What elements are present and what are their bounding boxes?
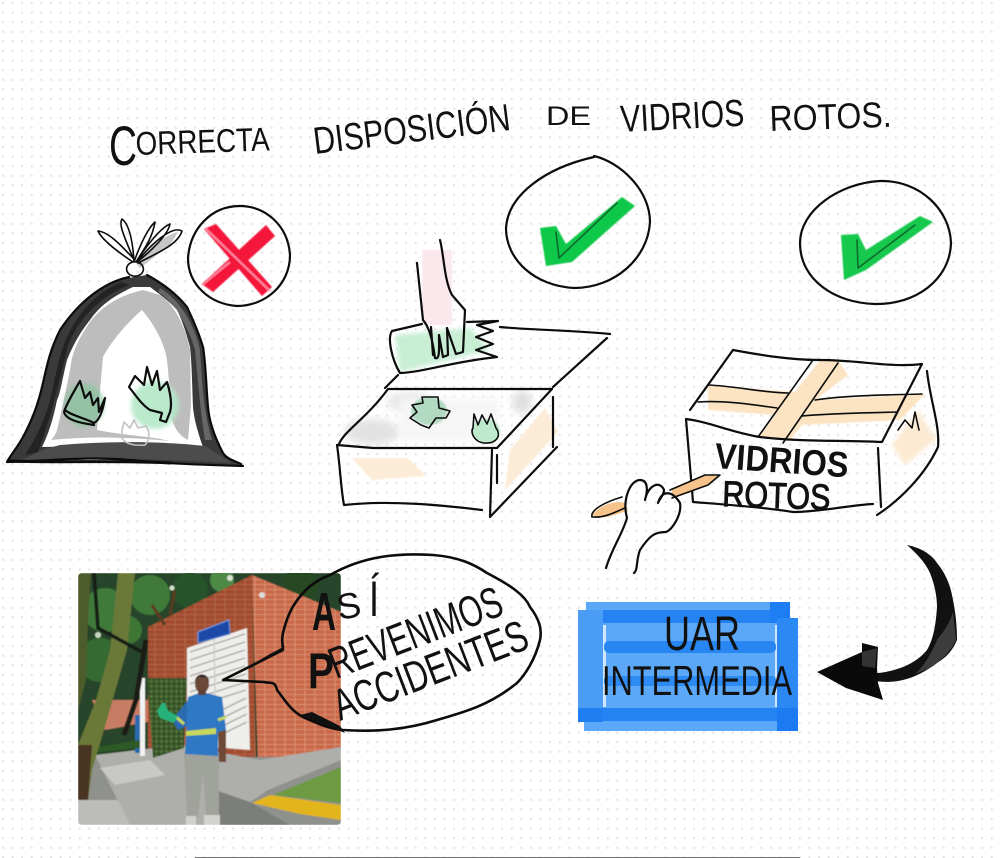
title: DISPOSICIÓN	[311, 96, 513, 163]
open box	[337, 327, 610, 517]
speech text: REVENIMOS	[322, 577, 509, 688]
bag knot and tied ends	[135, 232, 178, 268]
label text	[602, 608, 792, 704]
title: ORRECTA	[135, 120, 270, 162]
grass and yellow curb	[273, 767, 341, 803]
title: ROTOS.	[769, 94, 892, 139]
hand	[417, 240, 465, 358]
glass shard right	[129, 367, 171, 422]
label text on box: ROTOS	[722, 473, 831, 518]
illustration: hand placing bottle in open box	[337, 240, 610, 517]
photo of worker in front of building	[78, 567, 341, 825]
door	[187, 628, 250, 750]
title	[109, 93, 892, 177]
bag outline	[7, 275, 243, 466]
speech text: A	[312, 582, 336, 642]
speech text: ACCIDENTES	[326, 611, 535, 730]
icon: green check in circle 1	[506, 156, 650, 288]
glass shards inside box	[411, 397, 447, 425]
speech text	[308, 571, 535, 730]
speech text: S	[333, 583, 364, 628]
icon: garbage bag with broken glass	[7, 219, 243, 466]
sign	[198, 620, 230, 643]
icon: red X in circle	[188, 206, 290, 306]
illustration: sealed box labelled	[592, 350, 938, 573]
label text on box: VIDRIOS	[713, 435, 850, 485]
glass shard left	[64, 381, 105, 425]
label text on box	[713, 435, 850, 518]
tree trunk	[78, 573, 135, 800]
faint shard	[122, 420, 149, 445]
marker pen and hand	[592, 475, 720, 517]
title: C	[109, 114, 137, 177]
label text: UAR	[664, 608, 740, 661]
speech text: P	[308, 643, 334, 699]
label text: INTERMEDIA	[602, 657, 792, 704]
title: DE	[546, 101, 591, 131]
speech bubble	[223, 554, 541, 733]
tape lines	[698, 360, 922, 443]
arrow	[817, 545, 957, 700]
speech text: Í	[369, 571, 379, 627]
icon: green check in circle 2	[800, 181, 951, 304]
worker	[184, 753, 219, 817]
box: UAR Intermedia	[578, 602, 798, 731]
hedge	[147, 678, 187, 758]
bottle	[390, 321, 498, 373]
title: VIDRIOS	[619, 93, 745, 141]
